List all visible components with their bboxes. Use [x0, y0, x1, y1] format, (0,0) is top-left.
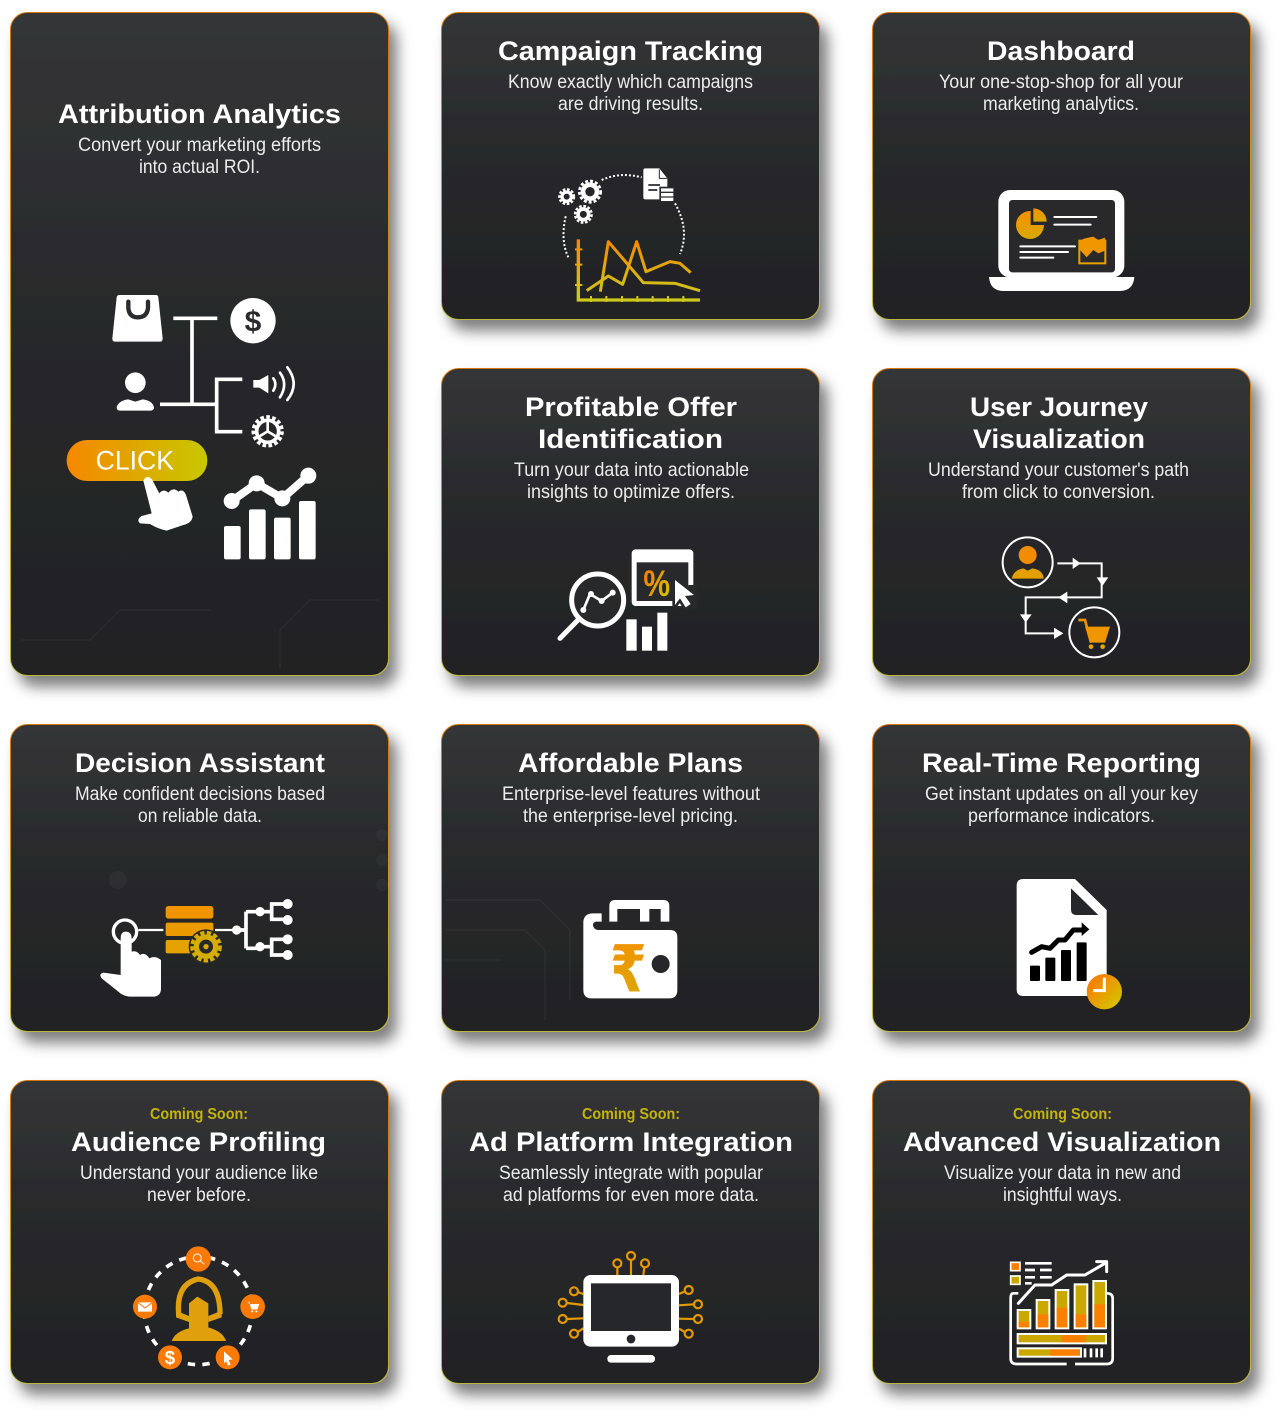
heading: Real-Time Reporting: Real-Time Reporting: [922, 748, 1201, 778]
text: Ad Platform description: ad platforms for even more data.: [503, 1185, 759, 1206]
icon: campaign chart with gears: [559, 168, 700, 302]
horizontal bars: [1018, 1334, 1106, 1357]
user circle: [1003, 537, 1053, 587]
button: CLICK: CLICK: [96, 445, 174, 475]
heading: Campaign Tracking: Campaign Tracking: [498, 36, 763, 66]
dollar node: $: [165, 1347, 176, 1368]
icon: dollar coin: [230, 298, 276, 343]
connectors: [559, 1252, 702, 1338]
person silhouette: [172, 1279, 226, 1341]
icon: speaker: [253, 367, 294, 400]
label: Coming Soon: Coming Soon:: [150, 1106, 248, 1123]
text: Advanced Visualization description: [944, 1163, 1181, 1206]
connector lines: [160, 318, 242, 432]
icon: offer analysis: [560, 549, 697, 651]
text: Ad Platform description: [499, 1163, 764, 1206]
pie chart: [1016, 208, 1047, 239]
text: Advanced Visualization description: Visualize your data in new and: [944, 1163, 1181, 1184]
panel: Campaign Tracking: [442, 12, 820, 320]
text: Campaign Tracking description: Know exactly which campaigns: [508, 72, 753, 93]
text: User Journey description: [928, 460, 1189, 503]
icon: attribution diagram: [67, 295, 316, 559]
heading: User Journey Visualization: Visualization: [973, 424, 1145, 454]
heading: Profitable Offer Identification: Identification: [538, 424, 723, 454]
dotted orbit: [563, 175, 684, 257]
text: Attribution Analytics description: into actual ROI.: [139, 157, 260, 178]
icon: audience ring: [133, 1246, 265, 1369]
vertical bars: [1018, 1281, 1106, 1328]
panel: Ad Platform Integration: [442, 1080, 820, 1384]
icon: pointing hand: [138, 477, 193, 531]
panel: Attribution Analytics: [10, 12, 388, 676]
icon: gear: [253, 417, 282, 446]
text: Dashboard description: [939, 72, 1184, 115]
icon: laptop dashboard: [989, 190, 1134, 291]
heading: Profitable Offer Identification: [525, 392, 738, 454]
label: Coming Soon: Coming Soon:: [1013, 1106, 1112, 1123]
clock badge: [1087, 974, 1122, 1009]
text: Affordable Plans description: Enterprise-level features without: [502, 784, 761, 805]
text: Decision Assistant description: Make confident decisions based: [75, 784, 325, 805]
trend arrow: [1018, 1262, 1107, 1303]
text: Real-Time Reporting description: Get instant updates on all your key: [925, 784, 1198, 805]
wallet clasp: [652, 955, 670, 973]
flow path: [1020, 558, 1108, 639]
text: Audience Profiling description: Understand your audience like: [80, 1163, 318, 1184]
text: Dashboard description: marketing analytics.: [983, 94, 1139, 115]
branching nodes: [232, 899, 293, 960]
icon: decision tree: [100, 899, 293, 997]
gear: [189, 929, 223, 964]
panel: Decision Assistant: [10, 724, 388, 1032]
heading: Advanced Visualization: Advanced Visualization: [903, 1127, 1221, 1157]
text: User Journey description: Understand your customer's path: [928, 460, 1189, 481]
icon: report with clock: [1017, 879, 1122, 1009]
icon: connected monitor: [559, 1252, 702, 1363]
mail node: [133, 1295, 157, 1319]
text: User Journey description: from click to conversion.: [962, 482, 1155, 503]
heading: Decision Assistant: Decision Assistant: [75, 748, 325, 778]
panel: Real-Time Reporting: [872, 724, 1250, 1032]
text: Real-Time Reporting description: performance indicators.: [968, 806, 1155, 827]
icon: gears: [559, 181, 601, 223]
panel: Audience Profiling: [10, 1080, 388, 1384]
icon: person: [117, 372, 154, 411]
percent sign: %: [643, 562, 670, 604]
icon: document: [643, 168, 674, 202]
bars: [626, 613, 667, 651]
database stack: [166, 906, 213, 953]
heading: Ad Platform Integration: Ad Platform Integration: [469, 1127, 793, 1157]
text: Attribution Analytics description: Convert your marketing efforts: [78, 135, 321, 156]
text: Audience Profiling description: [80, 1163, 318, 1206]
cursor node: [216, 1345, 240, 1369]
touch hand: [100, 920, 237, 997]
mini area chart: [1079, 237, 1105, 263]
heading: Affordable Plans: Affordable Plans: [518, 748, 743, 778]
text: Decision Assistant description: on reliable data.: [138, 806, 262, 827]
text: Campaign Tracking description: are driving results.: [558, 94, 703, 115]
text: Campaign Tracking description: [508, 72, 753, 115]
text: Profitable Offer description: insights to optimize offers.: [527, 482, 735, 503]
cart node: [240, 1294, 265, 1319]
text: Ad Platform description: Seamlessly integrate with popular: [499, 1163, 764, 1184]
heading: Dashboard: Dashboard: [987, 36, 1135, 66]
heading: User Journey Visualization: User Journey: [970, 392, 1148, 422]
search node: [186, 1246, 211, 1272]
icon: advanced chart: [1011, 1262, 1113, 1364]
cursor: [673, 580, 697, 608]
text: Attribution Analytics description: [78, 135, 321, 178]
text: Advanced Visualization description: insightful ways.: [1003, 1185, 1122, 1206]
magnifier: [560, 574, 624, 638]
panel: Advanced Visualization: [872, 1080, 1250, 1384]
text: Dashboard description: Your one-stop-shop for all your: [939, 72, 1184, 93]
icon: shopping bag: [112, 295, 163, 342]
text: Decision Assistant description: [75, 784, 325, 827]
panel: Dashboard: [872, 12, 1250, 320]
text: Profitable Offer description: [514, 460, 749, 503]
heading: Profitable Offer Identification: Profitable Offer: [525, 392, 738, 422]
panel: Profitable Offer Identification: [442, 368, 820, 676]
cart circle: [1069, 607, 1119, 657]
heading: Audience Profiling: Audience Profiling: [71, 1127, 326, 1157]
label: Coming Soon: Coming Soon:: [582, 1106, 680, 1123]
icon: user journey flow: [1003, 537, 1119, 657]
line chart: [575, 239, 700, 302]
panel: Affordable Plans: [442, 724, 820, 1032]
report bars: [1030, 922, 1089, 981]
text: Affordable Plans description: the enterprise-level pricing.: [523, 806, 738, 827]
heading: Attribution Analytics: Attribution Analytics: [58, 99, 341, 129]
rupee symbol: ₹: [610, 933, 647, 1008]
icon: rupee wallet: [583, 900, 677, 1008]
text: Profitable Offer description: Turn your data into actionable: [514, 460, 749, 481]
button: CLICK: [67, 440, 207, 481]
panel: User Journey Visualization: [872, 368, 1250, 676]
text: Affordable Plans description: [502, 784, 761, 827]
icon: dollar coin: $: [245, 305, 262, 338]
monitor: [583, 1275, 679, 1363]
icon: growth bar chart: [224, 468, 316, 559]
text: Audience Profiling description: never before.: [147, 1185, 251, 1206]
text: Real-Time Reporting description: [925, 784, 1198, 827]
heading: User Journey Visualization: [970, 392, 1148, 454]
legend: [1011, 1262, 1052, 1284]
